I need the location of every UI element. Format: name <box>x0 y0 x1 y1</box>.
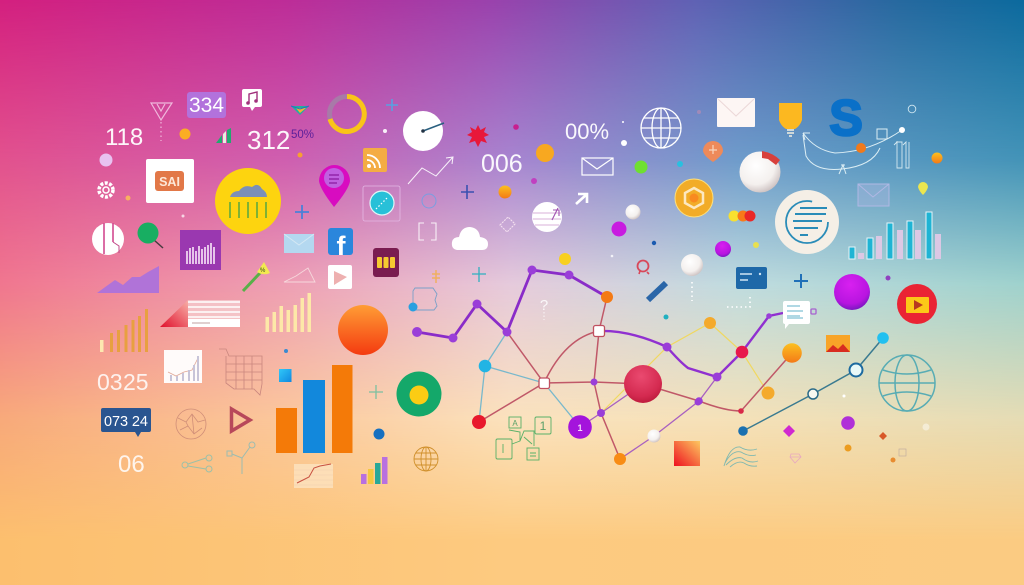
small purple square <box>811 309 816 314</box>
orange node <box>856 143 866 153</box>
yellow cloud rain badge <box>215 168 281 234</box>
time badge 073 24: 073 24 <box>104 414 148 430</box>
white ball with red cap <box>740 151 780 192</box>
icon: facebook: f <box>336 231 346 261</box>
plus <box>386 99 398 111</box>
green key icon <box>243 262 270 291</box>
thin purple links <box>580 377 717 459</box>
purple dot <box>531 178 537 184</box>
number badge 334: 334 <box>189 94 224 117</box>
orange ball <box>338 305 388 355</box>
diamond line icon <box>500 217 515 232</box>
faint dot <box>611 255 613 257</box>
gold hexagon badge <box>675 179 713 217</box>
mini bar chart <box>361 457 388 484</box>
blue links <box>479 332 580 427</box>
number 06: 06 <box>118 451 145 478</box>
green magnifier <box>138 222 163 248</box>
tree nodes <box>227 442 255 474</box>
number 118: 118 <box>105 124 143 151</box>
orange bar chart <box>100 309 148 352</box>
striped white circle <box>532 202 562 232</box>
lightbulb <box>779 103 802 136</box>
time badge 073 24 <box>101 408 151 437</box>
number 312: 312 <box>247 125 290 155</box>
gradient square <box>674 441 700 466</box>
ring node large <box>850 364 862 376</box>
cracked sphere icon <box>176 409 206 439</box>
plus <box>295 205 309 219</box>
ring node <box>808 389 818 399</box>
outline triangle <box>232 409 250 431</box>
orange dot <box>890 458 896 462</box>
white dot <box>383 129 387 133</box>
map pin <box>319 165 350 207</box>
cyan square <box>279 369 292 382</box>
magenta ball <box>834 274 870 310</box>
orange envelope <box>826 335 850 352</box>
orange dot <box>298 152 302 158</box>
plus <box>461 185 474 199</box>
teal dot <box>664 314 668 320</box>
orange dot <box>536 144 554 162</box>
faint dot <box>182 214 184 218</box>
white arrow <box>576 194 587 204</box>
stacked colour dots <box>728 210 756 222</box>
purple nodes <box>412 266 772 417</box>
time 03 25: 03 <box>97 369 123 395</box>
green letter tiles: 1 <box>540 419 547 433</box>
white cloud <box>452 227 488 250</box>
green ball <box>634 160 648 174</box>
teal plus <box>472 267 486 282</box>
teal line nodes <box>738 426 748 436</box>
blue S mark: S <box>829 90 863 146</box>
icon: signal bars <box>216 128 231 143</box>
question mark: ? <box>540 297 548 314</box>
red triangle table card <box>160 300 240 327</box>
rising arrow line <box>408 157 453 184</box>
red loop icon <box>639 271 649 274</box>
share nodes <box>182 455 212 472</box>
icon: coloured bird mark <box>291 106 309 115</box>
striped half circle <box>92 223 124 255</box>
yellow dot <box>559 253 571 265</box>
triangle logo with dotted stem <box>151 103 172 141</box>
outline number 11 <box>894 142 909 168</box>
white table chart <box>164 350 202 383</box>
compass card <box>363 186 400 221</box>
label 00%: 00% <box>565 119 609 144</box>
donut chart <box>330 96 364 132</box>
brackets <box>419 223 436 240</box>
green key icon: % <box>260 268 266 274</box>
speech bubble <box>783 301 810 329</box>
blue diagonal bar <box>648 283 666 300</box>
cream circle with text lines <box>775 190 839 254</box>
magenta dot <box>513 124 519 130</box>
icon: music note <box>242 89 262 111</box>
label 50%: 50% <box>291 129 314 141</box>
outline envelope <box>582 158 613 175</box>
purple outline envelope <box>858 184 889 206</box>
orange dot <box>180 128 190 140</box>
play card <box>328 265 352 289</box>
outline bubble <box>408 288 437 312</box>
orange ball <box>932 152 942 164</box>
green circle with yellow dot <box>396 372 442 416</box>
orange nodes <box>601 291 802 465</box>
purple ball <box>715 241 731 257</box>
thin yellow links <box>601 323 768 413</box>
purple numbered node: 1 <box>577 423 583 433</box>
line chart card <box>294 464 333 488</box>
network graph <box>417 270 883 459</box>
cyan dot <box>677 161 683 167</box>
arrow end node <box>899 127 905 133</box>
white square nodes <box>539 326 604 388</box>
faint blue ring <box>422 194 436 208</box>
network nodes <box>412 266 802 465</box>
faint line triangle <box>284 268 315 282</box>
navy dot <box>652 241 656 245</box>
magenta diamond <box>783 425 795 437</box>
small red node <box>738 408 744 414</box>
orange diamond <box>879 432 887 440</box>
main bar chart <box>276 365 352 453</box>
green letter tiles <box>496 417 551 460</box>
red ring <box>638 260 648 272</box>
yellow pin <box>918 182 928 195</box>
crimson ball <box>624 365 662 403</box>
pale purple dot <box>100 154 112 166</box>
purple dot <box>886 276 890 280</box>
teal globe <box>879 355 935 411</box>
magenta ball <box>612 222 626 236</box>
cyan node <box>877 332 889 344</box>
red node <box>472 415 486 429</box>
SAI card: SAI <box>159 175 180 189</box>
red star <box>467 125 489 147</box>
plus <box>794 274 808 288</box>
icon: gear <box>99 183 113 197</box>
purple ball <box>841 416 855 430</box>
cyan and lilac bar chart <box>849 212 941 259</box>
small dot <box>697 110 701 114</box>
curved white arrows <box>803 129 902 174</box>
icon: RSS <box>363 148 387 172</box>
dotted trails <box>692 282 750 307</box>
purple area chart <box>97 266 159 293</box>
blue dot <box>374 428 384 440</box>
blue card <box>736 267 767 289</box>
orange pin <box>703 141 723 162</box>
light blue envelope <box>284 234 314 253</box>
small ring <box>908 105 916 113</box>
orange globe <box>414 447 438 471</box>
white wire globe <box>641 108 681 148</box>
teal waves <box>724 447 758 467</box>
white ball <box>681 254 703 276</box>
maroon card with yellow blocks <box>373 248 399 277</box>
red links <box>479 297 792 459</box>
SAI card <box>146 159 194 203</box>
red node <box>736 346 748 358</box>
plus <box>369 385 383 399</box>
white ball <box>626 204 640 220</box>
purple equalizer square <box>180 230 221 270</box>
icon: facebook <box>328 228 353 261</box>
small orange dot <box>126 196 130 200</box>
orange dot <box>844 444 852 452</box>
orange ball <box>498 186 512 198</box>
teal trend line <box>743 338 883 431</box>
white dots <box>621 121 627 146</box>
yellow dot <box>753 242 759 248</box>
small orange arrows <box>432 270 440 283</box>
pale yellow bar chart <box>266 293 311 332</box>
green letter tiles: A <box>512 419 518 428</box>
purple trend line <box>417 270 607 338</box>
line grid map <box>219 349 262 395</box>
purple numbered node <box>568 415 592 439</box>
faint sparkle <box>922 424 930 430</box>
time 03 25: 25 <box>123 369 149 395</box>
white node <box>648 430 660 442</box>
white dot <box>842 394 846 398</box>
outline square <box>899 449 906 456</box>
number 006: 006 <box>481 150 523 178</box>
white envelope <box>717 98 755 127</box>
purple trend line two <box>599 313 783 377</box>
video play badge <box>897 284 937 324</box>
blue dot <box>284 349 288 353</box>
cyan node <box>479 360 491 372</box>
icon: clock <box>403 111 444 151</box>
gem outline <box>790 454 801 463</box>
